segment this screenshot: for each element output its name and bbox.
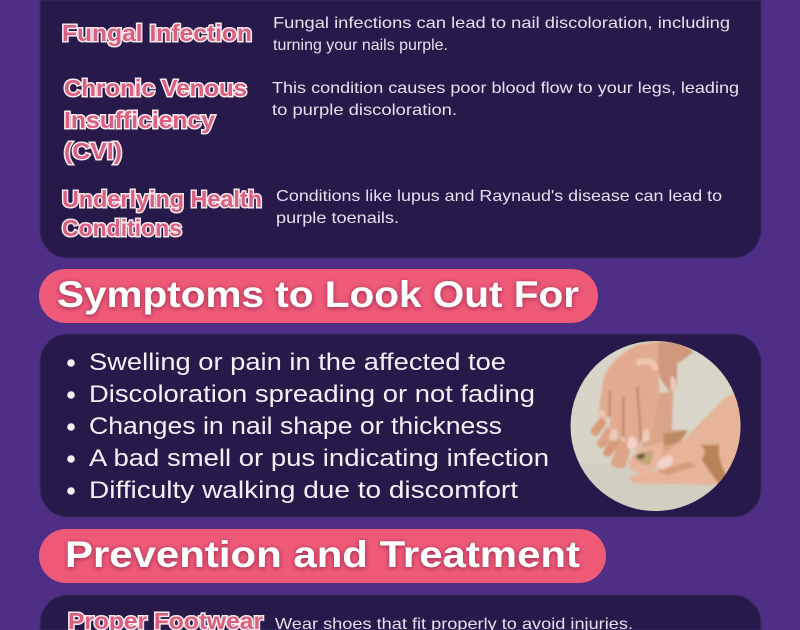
back hand fingers — [598, 342, 659, 450]
cause: chronic venous insufficiency: (CVI) — [64, 138, 122, 164]
fingernails — [627, 436, 637, 449]
symptoms list: Difficulty walking due to discomfort — [89, 477, 518, 504]
symptoms list — [67, 349, 549, 504]
heading: prevention: Prevention and Treatment — [65, 534, 580, 575]
panel: causes — [40, 0, 761, 258]
big toe — [628, 442, 664, 473]
cause: underlying health conditions: Underlying Health — [62, 186, 262, 212]
foot behind hand — [640, 392, 688, 457]
panel: symptoms — [40, 334, 761, 517]
cause: chronic venous insufficiency: Chronic Venous — [64, 75, 247, 101]
cause: underlying health conditions: Conditions — [62, 215, 182, 241]
cause: underlying health conditions: purple toenails. — [276, 210, 399, 227]
symptoms list: Swelling or pain in the affected toe — [89, 349, 506, 376]
symptoms list: Discoloration spreading or not fading — [89, 381, 535, 408]
heading: symptoms: Symptoms to Look Out For — [57, 274, 579, 315]
symptoms list: A bad smell or pus indicating infection — [89, 445, 549, 472]
cause: chronic venous insufficiency: This condition causes poor blood flow to your legs, leading — [272, 80, 739, 97]
cause: fungal infection: Fungal infections can lead to nail discoloration, including — [273, 15, 730, 32]
cause: chronic venous insufficiency — [64, 75, 739, 164]
heading: symptoms — [39, 269, 598, 323]
cause: fungal infection — [62, 15, 730, 54]
cause: underlying health conditions — [62, 186, 722, 241]
photo: hands holding toe — [570, 341, 742, 513]
cause: fungal infection: Fungal Infection — [62, 20, 252, 46]
symptoms list: Changes in nail shape or thickness — [89, 413, 502, 440]
heading: prevention — [39, 529, 606, 583]
thumb of back hand — [658, 342, 694, 392]
cause: underlying health conditions: Conditions like lupus and Raynaud's disease can lead to — [276, 188, 722, 205]
panel: prevention — [40, 595, 761, 630]
cause: chronic venous insufficiency: Insufficiency — [64, 107, 215, 133]
cause: chronic venous insufficiency: to purple discoloration. — [272, 102, 457, 119]
small toes — [591, 416, 607, 436]
thumbnail of front hand — [657, 455, 673, 469]
front hand — [630, 392, 742, 485]
cause: fungal infection: turning your nails purple. — [273, 37, 448, 54]
toenail — [633, 451, 653, 465]
prevention: proper footwear — [68, 608, 633, 630]
